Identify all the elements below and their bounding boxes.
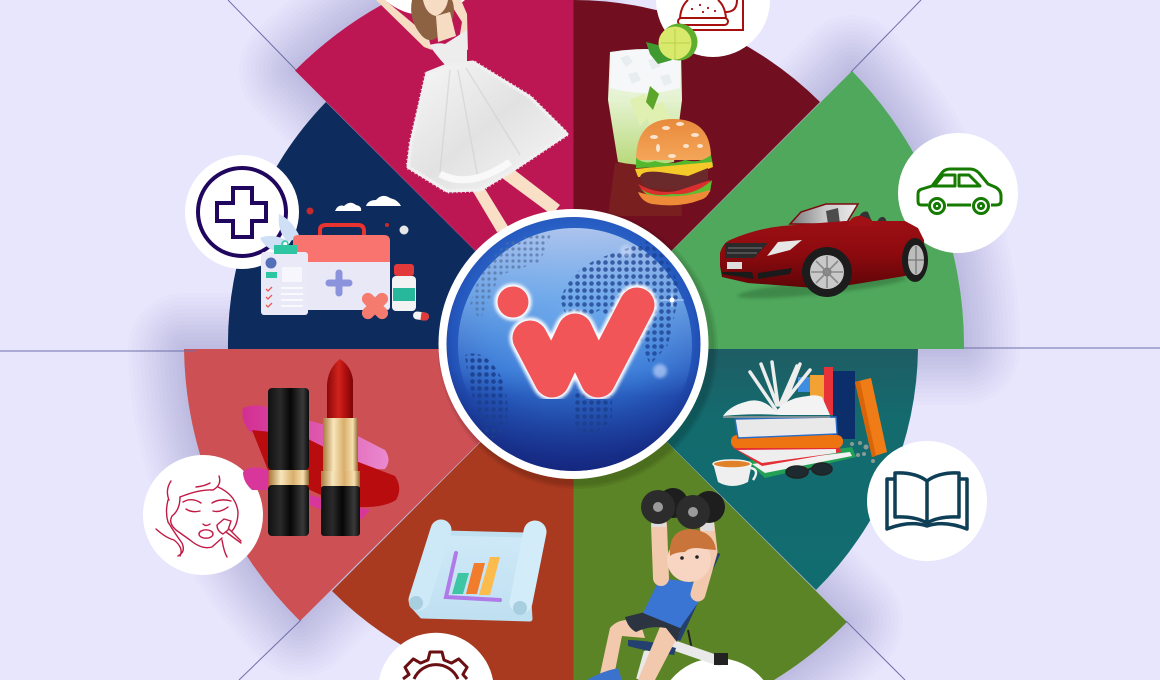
axes [446,553,500,600]
plus [329,273,349,293]
mint [646,42,672,64]
ground shadow [737,271,907,303]
open book [723,395,830,416]
upright books [798,377,810,392]
segment: fitness [574,349,847,680]
continents [465,232,680,440]
illustration: lipsticks [242,359,399,536]
black lipstick [268,388,309,536]
upper pink smear [242,406,388,469]
grille [725,243,768,258]
illustration: mojito and burger [608,24,713,216]
icon: beauty face badge [143,455,263,575]
icon: book badge [867,441,987,561]
icon: health cross badge [185,155,299,269]
icon: food badge [656,0,770,57]
wheel shadow [184,0,964,680]
segment: fashion [295,0,574,349]
bench [641,645,722,680]
lower pink smear [243,467,370,519]
tea cup [713,463,752,486]
torso [643,578,700,628]
bodice [429,30,467,66]
rear wheel [902,238,928,282]
headlight [767,240,802,256]
crumbs [850,441,875,463]
arms [659,525,661,578]
body [720,221,925,288]
white ring [438,209,708,479]
case body [300,255,390,310]
wheel segments [184,0,964,680]
white book [735,417,837,438]
red book [732,447,841,466]
sparkles [670,298,674,302]
hair and face [411,0,454,40]
glass [608,49,682,165]
skirt [408,62,567,191]
illustration: chart on scroll [409,530,535,619]
sphere [446,217,700,471]
illustration: dancer in white dress [376,0,567,232]
pill [413,311,429,321]
glasses [786,463,832,478]
burger [635,119,713,205]
bumper vents [722,268,792,279]
bottle [392,276,416,311]
logo glow [498,287,637,380]
case handle [320,225,364,238]
front wheel [802,247,852,297]
segment: health [228,102,574,349]
legs [638,622,680,680]
bandage [359,290,391,322]
leaves [260,214,300,252]
icon: car badge [898,133,1018,253]
reflection [608,163,682,216]
icon: fashion badge [385,0,465,15]
legs [472,184,509,232]
head [667,538,711,582]
segment: business [332,349,574,680]
green book [747,447,856,478]
windshield [790,204,858,224]
illustration: stack of books [713,362,887,486]
clouds [335,196,401,211]
left roll [419,530,441,600]
orange book [731,435,843,448]
logo: letter w [498,286,637,380]
segment: beauty [184,349,574,621]
seats [856,212,888,225]
plate [727,262,742,269]
arms [376,0,468,50]
shoe [587,668,622,680]
segment: cars [574,71,964,349]
illustration: first aid kit [260,196,429,322]
bars [452,573,469,594]
back rest [678,553,718,640]
ice [610,50,680,93]
illustration: red convertible car [720,204,928,303]
segment: books [574,349,918,590]
case lid [293,235,390,262]
lime [660,24,698,60]
right roll [521,532,535,602]
segment: food [574,0,820,349]
clipboard [261,252,308,315]
floating dots [306,208,314,214]
central globe logo [438,209,718,489]
icon: fitness badge [671,658,763,680]
globe shadow [438,209,718,489]
gloves [652,521,666,527]
highlight [458,228,692,462]
icon: business gear badge [379,633,493,680]
red lipstick [321,359,360,536]
dumbbells [641,488,725,529]
sheet [412,533,530,619]
fanned pages [750,362,810,410]
illustration: man lifting dumbbells [587,488,728,680]
red smear [252,430,399,507]
shorts [625,612,681,642]
